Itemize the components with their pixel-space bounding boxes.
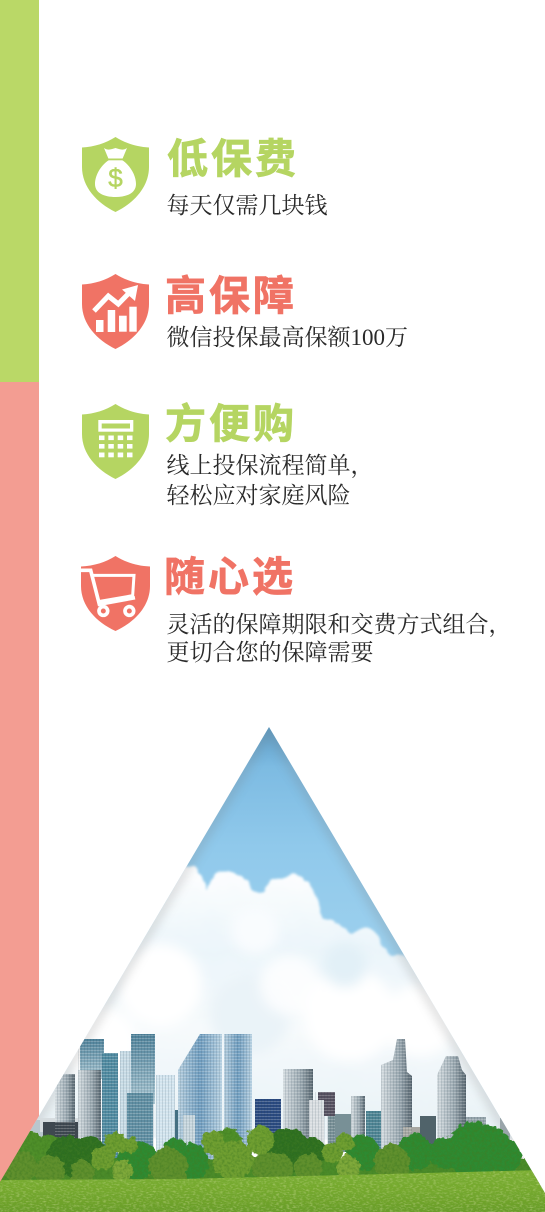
text: 线上投保流程简单: 轻松应对家庭风险 [166, 482, 350, 508]
image: triangle city skyline [0, 727, 545, 1212]
heading: 方便购: 方便购 [165, 401, 297, 447]
text: 线上投保流程简单 [166, 452, 374, 508]
lawn [0, 1170, 545, 1212]
text: 灵活的保障期限和交费方式组合 [166, 612, 512, 665]
icon: money bag shield: $ [108, 163, 123, 193]
icon: shopping cart shield [81, 556, 150, 631]
panel: convenient purchase [82, 401, 374, 508]
heading: 低保费: 低保费 [167, 136, 299, 182]
trees [0, 1122, 545, 1187]
text: 微信投保最高保额100万: 微信投保最高保额100万 [166, 325, 408, 350]
panel: flexible choice [81, 554, 512, 665]
left bar: green section [0, 0, 39, 382]
icon: money bag shield [82, 137, 149, 212]
edge shading [37, 728, 524, 1159]
text: 灵活的保障期限和交费方式组合: 灵活的保障期限和交费方式组合， [166, 612, 512, 637]
text: 每天仅需几块钱: 每天仅需几块钱 [166, 193, 328, 218]
city buildings [30, 1034, 510, 1165]
text: 线上投保流程简单: 线上投保流程简单， [166, 452, 374, 478]
clouds [25, 864, 512, 1140]
panel: high coverage [82, 273, 408, 350]
left bar: pink section [0, 382, 39, 1212]
panel: low premium [82, 136, 328, 218]
text: 灵活的保障期限和交费方式组合: 更切合您的保障需要 [166, 640, 374, 665]
heading: 高保障: 高保障 [165, 273, 297, 319]
heading: 随心选: 随心选 [164, 554, 296, 600]
icon: calculator shield [82, 404, 149, 479]
icon: growth chart shield [82, 274, 149, 349]
sky [32, 727, 504, 1126]
